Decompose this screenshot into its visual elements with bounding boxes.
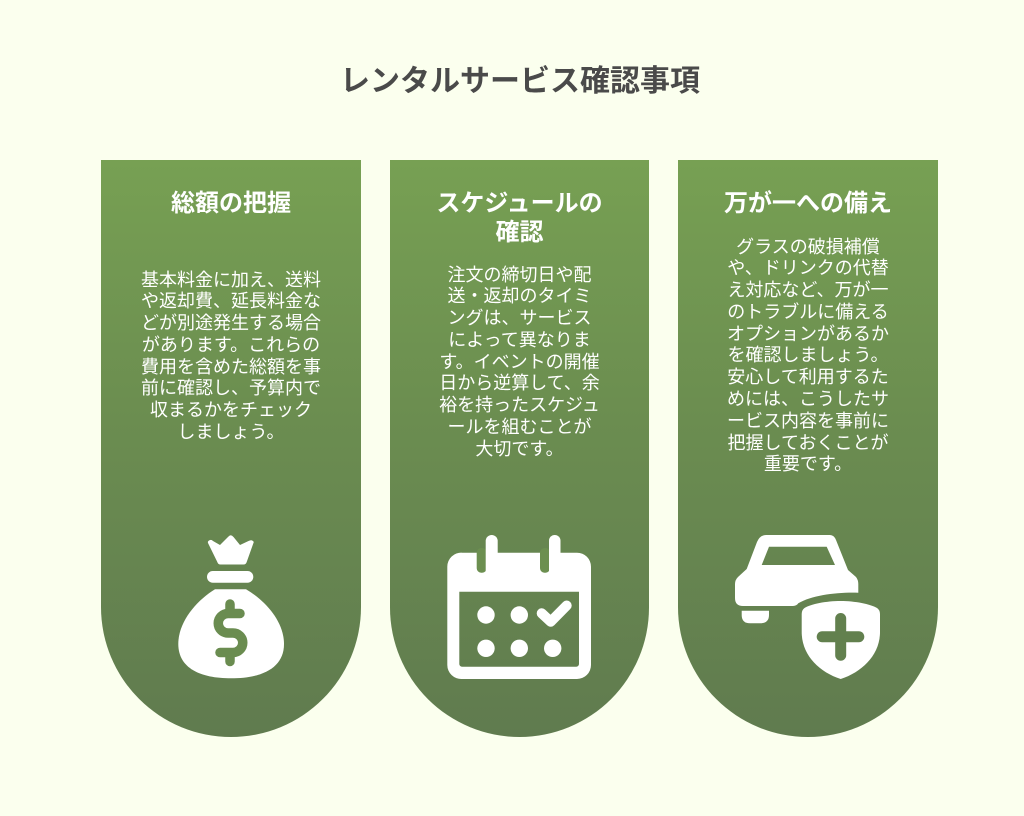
text: schedule: 裕を持ったスケジュ bbox=[439, 395, 600, 415]
text: schedule: によって異なりま bbox=[448, 330, 591, 350]
text: total cost: があります。これらの bbox=[142, 335, 320, 355]
text: total cost: 費用を含めた総額を事 bbox=[141, 357, 321, 377]
text: schedule: す。イベントの開催 bbox=[439, 352, 600, 372]
heading: schedule: 確認 bbox=[496, 219, 544, 246]
text: contingency: や、ドリンクの代替 bbox=[727, 258, 889, 278]
panel: schedule bbox=[390, 160, 649, 737]
heading: contingency: 万が一への備え bbox=[724, 190, 892, 217]
text: total cost: どが別途発生する場合 bbox=[141, 313, 321, 333]
text: contingency: グラスの破損補償 bbox=[736, 236, 880, 256]
text: total cost: 収まるかをチェック bbox=[150, 400, 312, 420]
text: schedule: ングは、サービス bbox=[448, 308, 592, 328]
panel: total cost bbox=[101, 160, 361, 737]
text: contingency: 安心して利用するた bbox=[727, 367, 889, 387]
text: contingency: え対応など、万が一 bbox=[727, 280, 889, 300]
text: contingency: のトラブルに備える bbox=[727, 302, 889, 322]
text: schedule: 注文の締切日や配 bbox=[448, 264, 592, 284]
heading: total cost: 総額の把握 bbox=[171, 190, 291, 217]
text: total cost: 前に確認し、予算内で bbox=[141, 378, 321, 398]
panel: contingency bbox=[678, 160, 938, 737]
text: total cost: しましょう。 bbox=[178, 422, 284, 442]
heading: schedule bbox=[436, 190, 603, 246]
text: contingency: オプションがあるか bbox=[727, 324, 889, 344]
text: total cost: や返却費、延長料金な bbox=[141, 291, 321, 311]
text: contingency: ービス内容を事前に bbox=[727, 411, 889, 431]
text: contingency: を確認しましょう。 bbox=[728, 345, 888, 365]
heading: schedule: スケジュールの bbox=[436, 190, 603, 217]
icon: calendar bbox=[447, 535, 591, 679]
text: total cost: 基本料金に加え、送料 bbox=[141, 270, 321, 290]
text: contingency: 把握しておくことが bbox=[728, 433, 888, 453]
text: schedule: 日から逆算して、余 bbox=[439, 373, 600, 393]
icon: car with shield bbox=[735, 535, 880, 679]
text: contingency bbox=[727, 236, 889, 474]
text: total cost bbox=[141, 270, 321, 442]
text: schedule bbox=[439, 264, 600, 459]
title: レンタルサービス確認事項 bbox=[340, 65, 700, 98]
text: contingency: 重要です。 bbox=[764, 454, 852, 474]
icon: money bag bbox=[178, 535, 284, 678]
text: schedule: ールを組むことが bbox=[448, 417, 592, 437]
text: schedule: 大切です。 bbox=[475, 439, 564, 459]
text: schedule: 送・返却のタイミ bbox=[448, 286, 592, 306]
text: contingency: めには、こうしたサ bbox=[727, 389, 889, 409]
